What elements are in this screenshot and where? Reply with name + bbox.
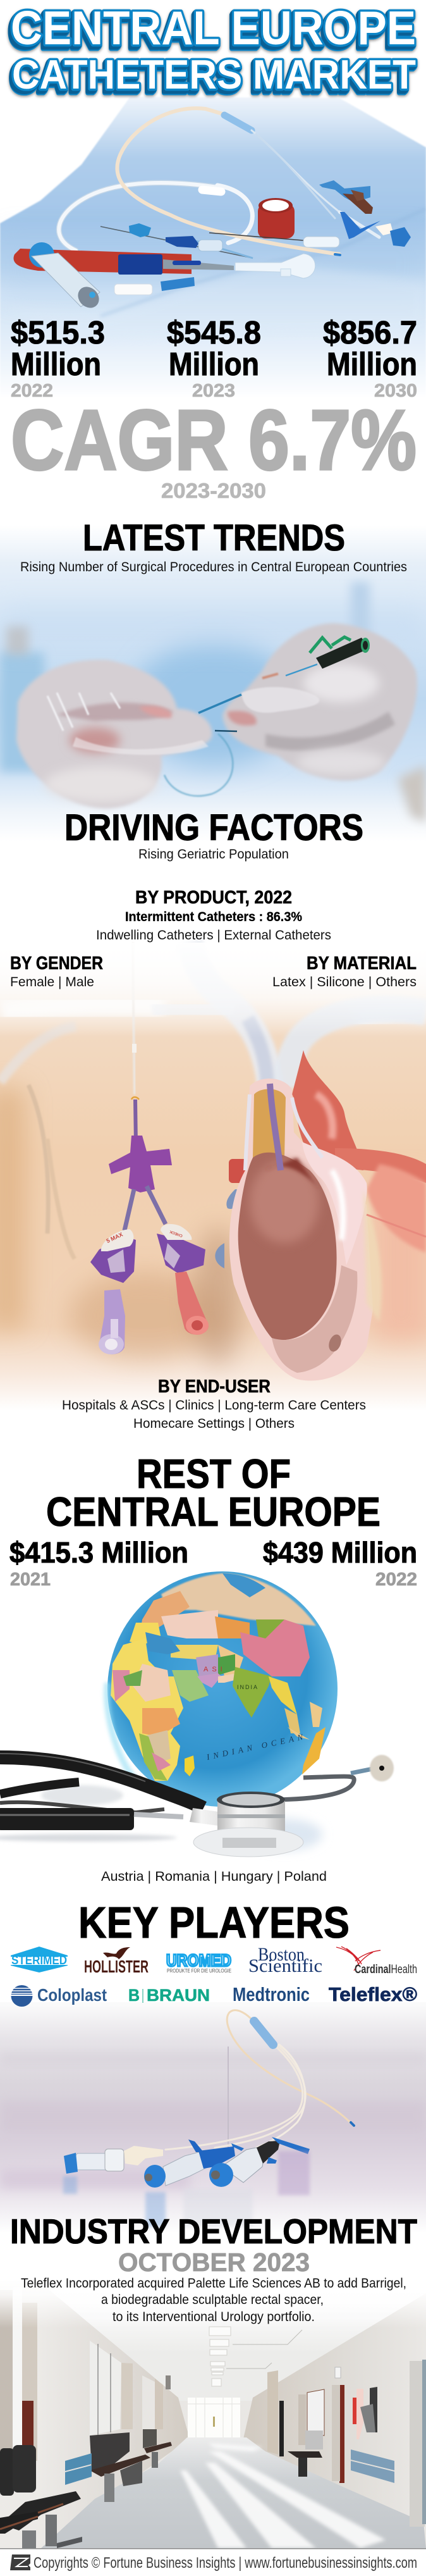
logo: Teleflex: Teleflex® [329, 1983, 417, 2005]
section: by end-user: BY END-USER [158, 1377, 271, 1397]
stat: 2022 market size: $515.3 [11, 314, 105, 350]
logo: Coloplast [11, 1985, 107, 2007]
logo: Coloplast: Coloplast [37, 1985, 107, 2005]
blue wall panels [65, 2449, 394, 2485]
section: by product: Indwelling Catheters | External Catheters [96, 928, 331, 943]
logo: Uromed: PRODUKTE FÜR DIE UROLOGIE [167, 1968, 231, 1974]
stat: 2030 market size: Million [327, 346, 417, 382]
icon: stethoscope [0, 1754, 394, 1857]
left chairs [0, 2429, 172, 2548]
heading: rest of central europe: REST OF [137, 1451, 291, 1497]
logo: Boston Scientific [248, 1944, 322, 1976]
icon: heart cross-section [229, 1079, 426, 1381]
icon: blue clips and brown caps [319, 180, 411, 247]
icon: syringe [29, 242, 103, 312]
text: driving factor item: Rising Geriatric Population [138, 847, 289, 862]
icon: globe: INDIA [237, 1684, 259, 1690]
logo: Sterimed: STERIMED [11, 1954, 67, 1967]
section: by product [96, 888, 331, 943]
icon: needle with blue hubs [100, 223, 339, 258]
stat: rest of central europe 2021 [9, 1536, 188, 1590]
logo: Fortune Business Insights [10, 2554, 30, 2570]
heading: rest of central europe: CENTRAL EUROPE [46, 1489, 380, 1535]
catheter: cream line with blue hub [117, 108, 379, 255]
icon: second hub [144, 2139, 235, 2188]
section: by end-user: Homecare Settings | Others [133, 1416, 295, 1431]
ceiling lights [209, 2327, 231, 2386]
heading: driving factors: DRIVING FACTORS [64, 807, 363, 848]
panel: company logos row one [11, 1944, 417, 1976]
section: by gender [10, 953, 103, 989]
panel: heart anatomy with catheter [0, 943, 426, 1411]
logo: Hollister: HOLLISTER [84, 1957, 149, 1976]
section: by end-user [62, 1377, 366, 1431]
fire extinguisher rack [335, 2367, 377, 2439]
panel: gloved hands holding catheter [0, 525, 426, 841]
icon: right gloved hand [222, 623, 417, 781]
title [11, 1, 416, 97]
stat: 2022 market size: Million [11, 346, 101, 382]
logo: Medtronic: Medtronic [233, 1983, 310, 2005]
stat: 2030 market size [323, 314, 417, 401]
icon: globe: ASI [204, 1666, 226, 1673]
heading: rest of central europe [46, 1451, 380, 1535]
icon: red cylinder [258, 198, 295, 238]
section: by gender: Female | Male [10, 975, 94, 989]
heading: latest trends: LATEST TRENDS [83, 517, 345, 559]
section: by end-user: Hospitals & ASCs | Clinics | Long-term Care Centers [62, 1398, 366, 1413]
icon: small connectors [114, 277, 195, 295]
icon: third hub [209, 2137, 310, 2187]
stat: 2022 market size [11, 314, 105, 401]
text: countries: Austria | Romania | Hungary | Poland [101, 1869, 327, 1884]
text: latest trend item: Rising Number of Surgical Procedures in Central European Countries [20, 560, 407, 574]
catheter: white loop tube [59, 183, 252, 251]
date: october 2023: OCTOBER 2023 [118, 2248, 310, 2277]
logo: Cardinal Health: CardinalHealth [355, 1963, 417, 1976]
icon: red aorta [215, 1050, 426, 1268]
icon: catheter inside heart [270, 1084, 281, 1170]
footer [0, 2548, 426, 2576]
icon: red scalpel [13, 249, 234, 275]
text: industry development description: to its Interventional Urology portfolio. [113, 2310, 315, 2324]
icon: right clamp and red cap [157, 1224, 209, 1335]
icon: catheter tubes [166, 2010, 354, 2150]
section: by product: Intermittent Catheters : 86.3% [125, 910, 302, 924]
left wall [0, 2281, 190, 2548]
icon: globe [107, 1571, 338, 1807]
stat: 2023 market size [167, 314, 261, 401]
logo: Boston Scientific: Boston [258, 1944, 305, 1965]
icon: right clamp and red cap: CHECK [169, 1229, 183, 1237]
reflections [63, 2151, 310, 2227]
stat: rest of central europe 2022: $439 Million [263, 1536, 417, 1569]
section: by material [272, 953, 417, 989]
icon: clear hub [235, 254, 315, 278]
logo: B Braun: BRAUN [147, 1986, 210, 2005]
left windows [0, 2287, 171, 2464]
logo: Hollister [84, 1947, 149, 1976]
stat: 2030 market size: 2030 [374, 381, 417, 401]
panel: catheter kit with blue caps [0, 2002, 426, 2233]
stat: 2030 market size: $856.7 [323, 314, 417, 350]
icon: purple catheter hub and wings [109, 1097, 172, 1230]
icon: vessel branches [132, 943, 426, 1094]
icon: left clamp and purple cap [90, 1229, 136, 1354]
logo: Cardinal Health [336, 1947, 417, 1976]
stat: CAGR: 2023-2030 [161, 479, 266, 502]
stat: 2023 market size: Million [169, 346, 259, 382]
text: industry development description: a biodegradable sculptable rectal spacer, [101, 2293, 324, 2307]
right wall [243, 2293, 426, 2530]
icon: blue catheter wire and dark connector [164, 637, 370, 796]
stat: rest of central europe 2021: $415.3 Million [9, 1536, 188, 1569]
panel: hospital corridor [0, 2277, 426, 2548]
stat: rest of central europe 2022 [263, 1536, 417, 1590]
stat: 2023 market size: 2023 [192, 381, 235, 401]
stat: rest of central europe 2021: 2021 [10, 1570, 51, 1590]
section: by gender: BY GENDER [10, 953, 103, 974]
icon: globe: INDIAN OCEAN [205, 1731, 307, 1762]
logo: Uromed: UROMED [166, 1951, 231, 1970]
panel: hero catheter kit image [0, 97, 426, 405]
section: by product: BY PRODUCT, 2022 [135, 888, 292, 908]
floor sun rays [180, 2443, 386, 2548]
far window [188, 2398, 240, 2437]
stat: 2022 market size: 2022 [11, 381, 53, 401]
logo: B Braun: B [128, 1986, 140, 2005]
icon: first hub [64, 2146, 163, 2174]
stat: 2023 market size: $545.8 [167, 314, 261, 350]
right doors [267, 2360, 426, 2527]
section: by material: Latex | Silicone | Others [272, 975, 417, 989]
icon: left clamp and purple cap: 5 MAX [106, 1231, 124, 1244]
text: industry development description [21, 2276, 406, 2324]
heading: key players: KEY PLAYERS [78, 1898, 350, 1947]
stat: rest of central europe 2022: 2022 [375, 1570, 417, 1590]
right chairs [288, 2430, 323, 2477]
panel: company logos row two [11, 1983, 417, 2007]
floor [41, 2437, 426, 2548]
logo: Boston Scientific: Scientific [248, 1955, 322, 1976]
icon: left gloved hand [16, 660, 212, 808]
logo: Sterimed [11, 1947, 68, 1972]
